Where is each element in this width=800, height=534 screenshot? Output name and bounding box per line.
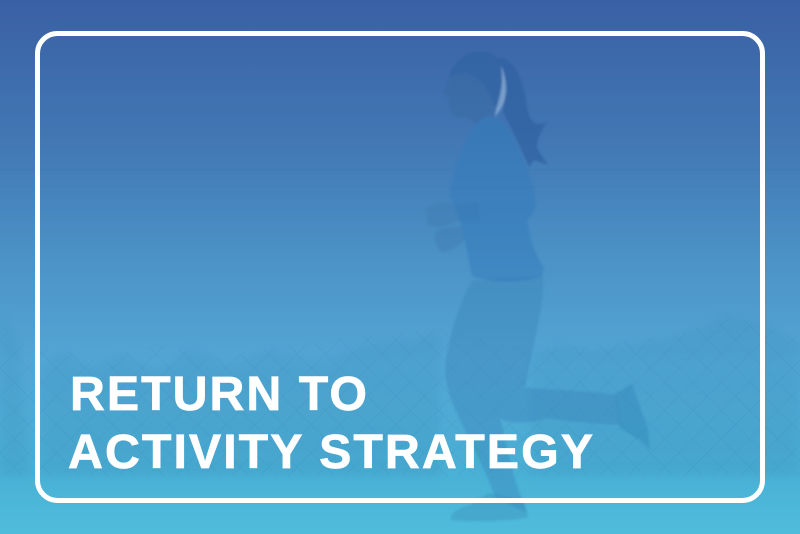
photo: runner silhouette bbox=[426, 52, 650, 521]
runner face and neck bbox=[444, 73, 496, 124]
runner upper hand bbox=[426, 203, 480, 227]
runner ponytail bbox=[497, 57, 548, 167]
frame border bbox=[38, 34, 762, 500]
background: horizontal fence wires bbox=[0, 170, 800, 187]
runner front shoe bbox=[451, 493, 528, 521]
title line 2: ACTIVITY STRATEGY bbox=[68, 426, 595, 479]
runner back shoe bbox=[615, 384, 650, 450]
background: trees behind fence bbox=[0, 310, 800, 476]
ground band bbox=[0, 476, 800, 534]
runner lower hand bbox=[435, 226, 465, 252]
title line 1: RETURN TO bbox=[70, 368, 369, 421]
runner headband bbox=[495, 65, 506, 117]
runner legs bbox=[445, 276, 620, 513]
background: chain-link fence bbox=[0, 332, 800, 476]
runner hair bbox=[449, 52, 503, 108]
runner shirt bbox=[450, 117, 544, 282]
title bbox=[68, 368, 595, 479]
